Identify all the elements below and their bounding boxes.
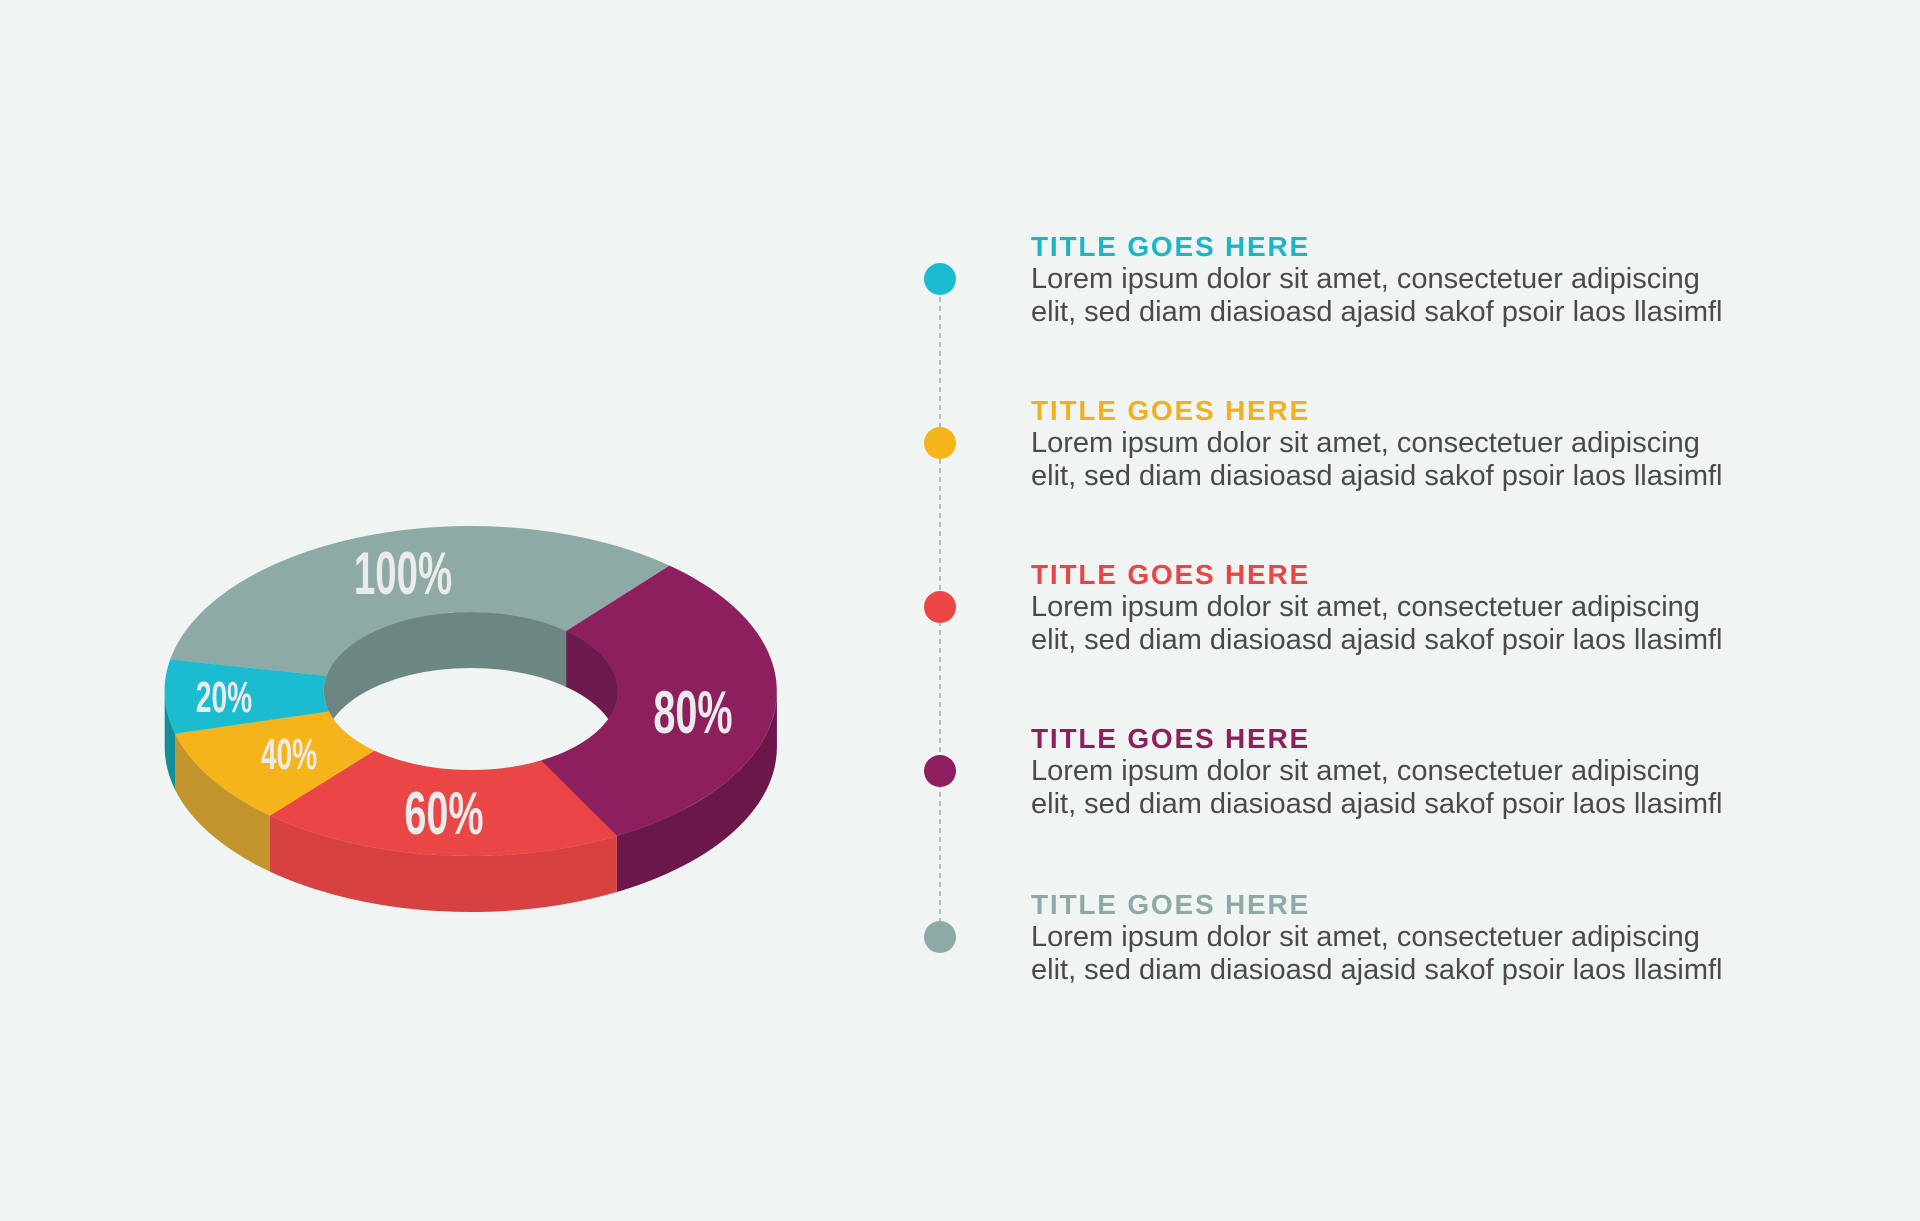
item 4: Lorem ipsum dolor sit amet, consectetuer adipiscing [1031,755,1700,787]
item 1: elit, sed diam diasioasd ajasid sakof psoir laos llasimfl [1031,296,1722,328]
percentage labels: 80% [653,679,733,746]
item 5: Lorem ipsum dolor sit amet, consectetuer adipiscing [1031,921,1700,953]
item 5: elit, sed diam diasioasd ajasid sakof psoir laos llasimfl [1031,954,1722,986]
item 2 [1031,395,1722,492]
percentage labels: 100% [354,539,452,607]
dot 3 [924,591,956,623]
inner wall [324,612,618,770]
item 2: TITLE GOES HERE [1031,395,1310,426]
percentage labels: 60% [404,780,484,847]
item 4: elit, sed diam diasioasd ajasid sakof psoir laos llasimfl [1031,788,1722,820]
top segment: red 60% [270,751,617,856]
percentage labels: 40% [261,730,317,779]
item 2: Lorem ipsum dolor sit amet, consectetuer adipiscing [1031,427,1700,459]
dot 1 [924,263,956,295]
top segment: yellow 40% [175,712,374,816]
item 3: TITLE GOES HERE [1031,559,1310,590]
item 1: Lorem ipsum dolor sit amet, consectetuer adipiscing [1031,263,1700,295]
dot 4 [924,755,956,787]
item 3 [1031,559,1722,656]
donut shapes [165,526,777,912]
top segment: cyan 20% [165,660,329,734]
side walls [165,691,777,912]
item 3: Lorem ipsum dolor sit amet, consectetuer adipiscing [1031,591,1700,623]
top segment: gray 100% [170,526,670,676]
item 4: TITLE GOES HERE [1031,723,1310,754]
item 3: elit, sed diam diasioasd ajasid sakof psoir laos llasimfl [1031,624,1722,656]
item 5: TITLE GOES HERE [1031,889,1310,920]
item 1: TITLE GOES HERE [1031,231,1310,262]
item 2: elit, sed diam diasioasd ajasid sakof psoir laos llasimfl [1031,460,1722,492]
item 5 [1031,889,1722,986]
dot 5 [924,921,956,953]
percentage labels: 20% [196,673,252,722]
top segment: purple 80% [541,566,777,836]
item 4 [1031,723,1722,820]
percentage labels [196,539,733,847]
donut chart [164,526,777,912]
item 1 [1031,231,1722,328]
dot 2 [924,427,956,459]
